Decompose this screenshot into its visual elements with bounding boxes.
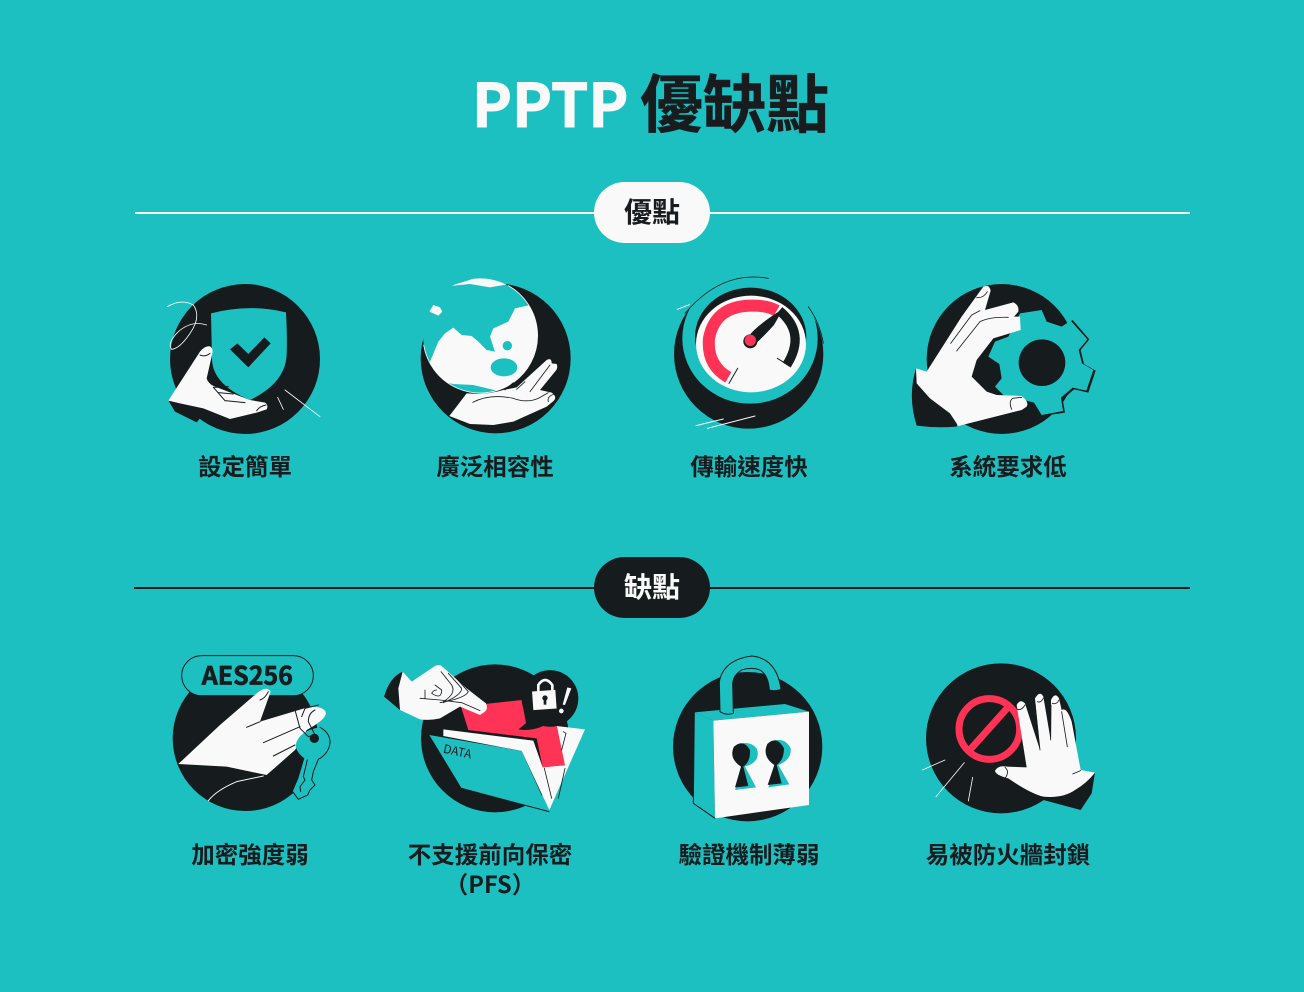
icon: speedometer	[674, 273, 823, 429]
label: broad compatibility: 廣泛相容性	[436, 448, 554, 482]
title: PPTP	[472, 58, 628, 145]
section header: pros	[135, 182, 1190, 243]
section header: cons	[134, 557, 1190, 618]
label: no forward secrecy: 不支援前向保密	[408, 836, 572, 870]
icon: hand turning gear	[912, 284, 1096, 434]
icon: hand holding globe	[421, 277, 571, 433]
label: no forward secrecy	[408, 836, 572, 900]
icon: AES256 key	[173, 656, 330, 811]
icon: AES256 key: AES256	[201, 657, 293, 693]
label: weak encryption: 加密強度弱	[191, 836, 309, 870]
label: weak authentication: 驗證機制薄弱	[678, 836, 820, 870]
icon: hand blocking with prohibition sign	[922, 663, 1095, 813]
icon: hand holding shield	[167, 284, 320, 434]
section header: cons: 缺點	[624, 566, 680, 606]
section header: pros: 優點	[624, 191, 680, 231]
title	[472, 55, 829, 146]
label: fast speed: 傳輸速度快	[690, 448, 808, 482]
icon: folder and hand: DATA	[442, 740, 474, 763]
label: low system requirements: 系統要求低	[949, 448, 1067, 482]
label: no forward secrecy: （PFS）	[445, 866, 535, 900]
label: easy setup: 設定簡單	[198, 448, 292, 482]
title: 優缺點	[640, 55, 829, 146]
icon: padlock with two keyholes	[673, 656, 822, 821]
label: blocked by firewall: 易被防火牆封鎖	[926, 836, 1090, 870]
icon: folder and hand	[384, 664, 585, 812]
